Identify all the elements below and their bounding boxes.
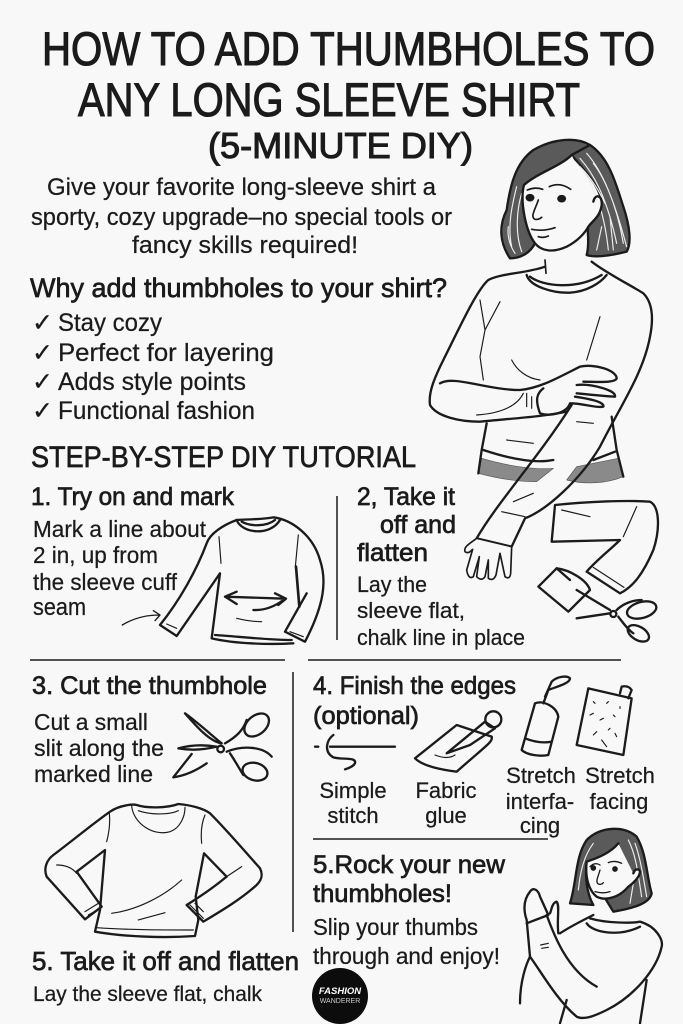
step 4 heading: (optional) xyxy=(313,702,419,730)
small woman illustration xyxy=(520,829,662,1023)
step 4 heading xyxy=(313,672,516,730)
checklist: ✓ xyxy=(32,397,53,425)
intro text: Give your favorite long-sleeve shirt a xyxy=(47,174,437,201)
step 2 text: Lay the xyxy=(357,572,427,597)
title xyxy=(42,22,655,166)
label: simple stitch: stitch xyxy=(327,803,379,828)
step 5 flatten heading: 5. Take it off and flatten xyxy=(32,946,299,976)
step 5 rock text: Slip your thumbs xyxy=(313,914,478,940)
step 5 rock text xyxy=(313,914,500,969)
checklist: ✓ xyxy=(32,309,53,337)
step 2 text xyxy=(357,572,525,650)
step 1 text xyxy=(33,516,207,621)
label: stretch facing: facing xyxy=(590,789,648,814)
step 4 heading: 4. Finish the edges xyxy=(313,672,516,700)
logo: Fashion Wanderer: FASHION xyxy=(319,986,362,997)
icon: fabric glue xyxy=(415,711,501,772)
step 3 scissors and shirt xyxy=(45,709,273,937)
divider step 1-2 xyxy=(336,496,338,640)
step 3 heading: 3. Cut the thumbhole xyxy=(32,672,267,700)
label: simple stitch: Simple xyxy=(319,778,387,803)
step 5 rock heading: 5.Rock your new xyxy=(313,851,506,879)
label: stretch interfacing: cing xyxy=(520,813,560,838)
label: stretch facing xyxy=(585,763,655,814)
step 5 rock heading xyxy=(313,851,506,908)
label: fabric glue: glue xyxy=(425,803,467,828)
checklist: Perfect for layering xyxy=(58,339,274,367)
step 3 text: slit along the xyxy=(34,735,164,761)
icon: glue bottle xyxy=(522,677,570,756)
step 1 shirt with arrows xyxy=(122,517,324,644)
step 5 rock text: through and enjoy! xyxy=(313,943,500,969)
checklist: Stay cozy xyxy=(58,309,162,337)
step 1 heading: 1. Try on and mark xyxy=(31,483,234,511)
label: stretch interfacing xyxy=(506,763,576,838)
intro text: fancy skills required! xyxy=(132,232,358,259)
step 5 rock heading: thumbholes! xyxy=(313,880,452,908)
step 2 heading: flatten xyxy=(357,539,428,567)
label: stretch interfacing: interfa- xyxy=(506,789,574,814)
step 1 text: the sleeve cuff xyxy=(33,569,178,595)
title: (5-MINUTE DIY) xyxy=(208,125,473,166)
step 3 text xyxy=(34,709,164,787)
step 5 flatten text: Lay the sleeve flat, chalk xyxy=(33,983,262,1006)
step 2 text: chalk line in place xyxy=(357,625,525,650)
large woman illustration xyxy=(430,140,658,645)
label: simple stitch xyxy=(319,778,387,828)
step 2 heading: off and xyxy=(380,511,456,539)
heading: why add thumbholes: Why add thumbholes to your shirt? xyxy=(30,273,447,303)
checklist: ✓ xyxy=(32,368,53,396)
step 4 icons xyxy=(315,677,632,772)
checklist xyxy=(32,309,274,425)
step 1 text: Mark a line about xyxy=(33,516,207,542)
checklist: ✓ xyxy=(32,339,53,367)
label: fabric glue: Fabric xyxy=(415,778,477,803)
heading: step-by-step tutorial: STEP-BY-STEP DIY TUTORIAL xyxy=(31,441,416,474)
intro text xyxy=(31,174,452,259)
icon: stretch facing xyxy=(577,686,632,755)
step 2 heading: 2, Take it xyxy=(357,483,455,511)
step 3 text: marked line xyxy=(34,761,153,787)
label: stretch interfacing: Stretch xyxy=(506,763,576,788)
logo: Fashion Wanderer: WANDERER xyxy=(320,998,360,1005)
step 2 heading xyxy=(357,483,456,567)
intro text: sporty, cozy upgrade–no special tools or xyxy=(31,204,452,231)
checklist: Adds style points xyxy=(58,368,246,396)
step 1 text: 2 in, up from xyxy=(33,542,158,568)
label: fabric glue xyxy=(415,778,477,828)
checklist: Functional fashion xyxy=(58,397,255,425)
title: ANY LONG SLEEVE SHIRT xyxy=(78,73,580,126)
step 2 text: sleeve flat, xyxy=(357,598,465,623)
step 1 text: seam xyxy=(33,594,86,621)
logo: Fashion Wanderer xyxy=(312,968,368,1024)
label: stretch facing: Stretch xyxy=(585,763,655,788)
step 3 text: Cut a small xyxy=(34,709,148,735)
icon: simple stitch xyxy=(315,735,395,769)
